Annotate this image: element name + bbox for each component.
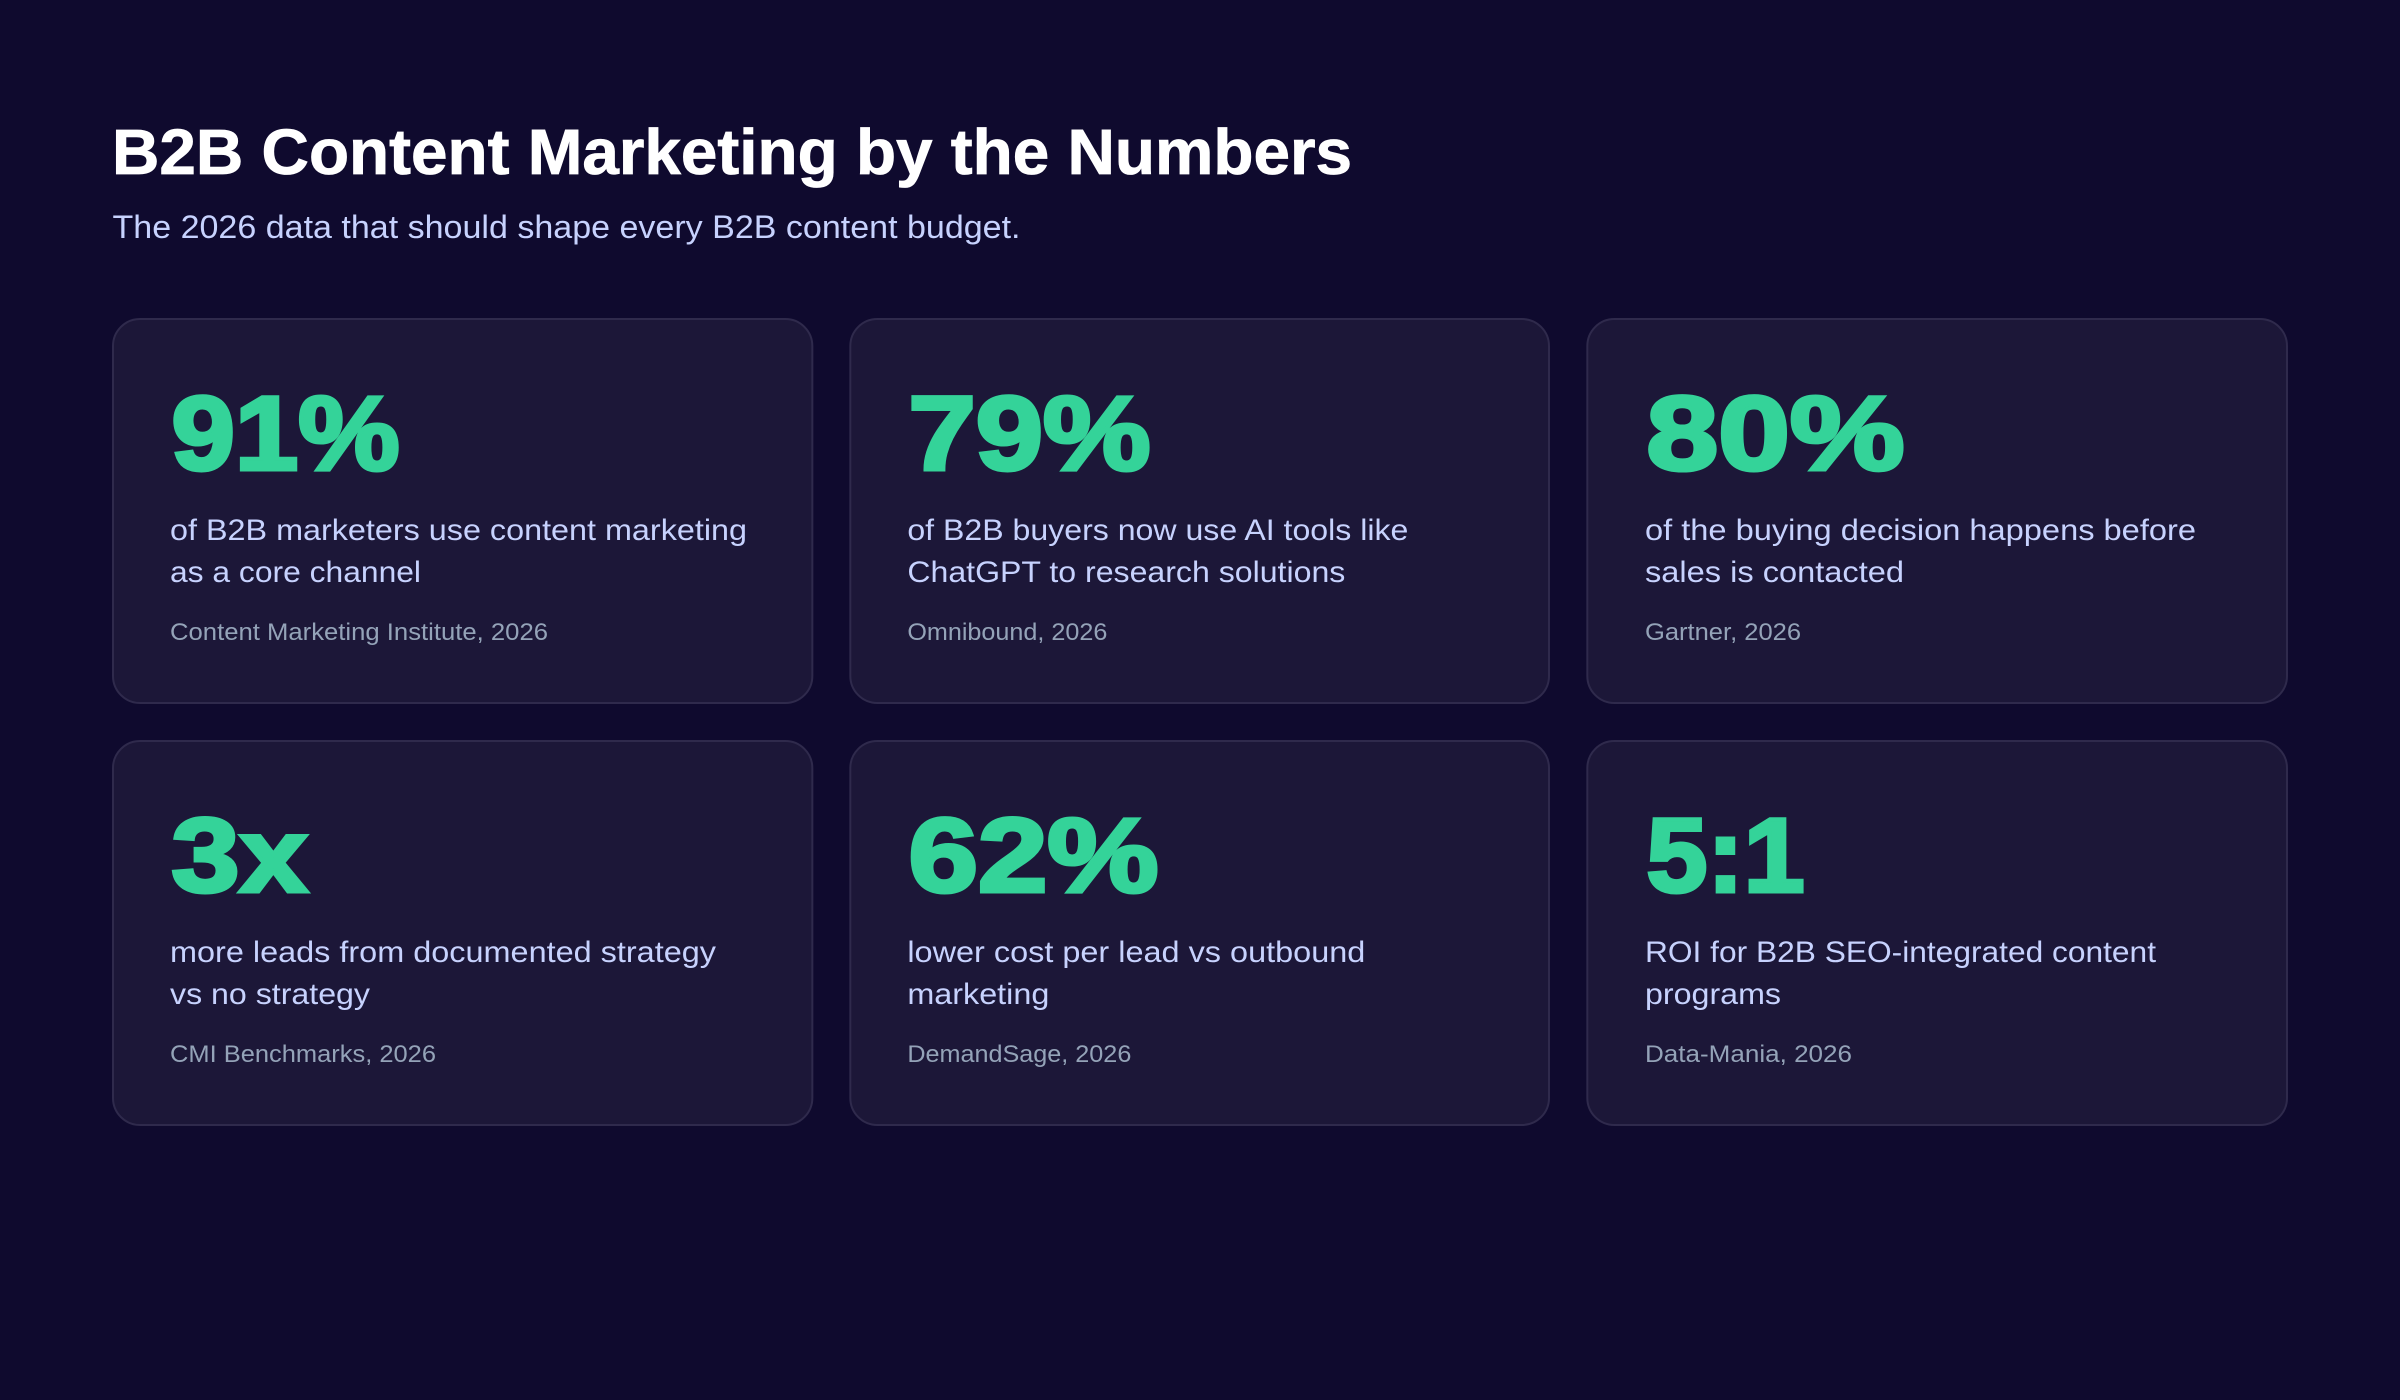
description: 62%: marketing bbox=[907, 978, 1049, 1011]
description: 3x: vs no strategy bbox=[170, 978, 370, 1011]
description: 5:1: ROI for B2B SEO-integrated content bbox=[1645, 936, 2157, 969]
description: 3x bbox=[170, 936, 716, 1011]
stat: 5:1: 5:1 bbox=[1646, 798, 1804, 914]
description: 79% bbox=[907, 514, 1408, 589]
stat: 80%: 80% bbox=[1646, 376, 1904, 492]
description: 80%: of the buying decision happens before bbox=[1645, 514, 2196, 547]
stat: 91%: 91% bbox=[172, 376, 400, 492]
source: CMI Benchmarks: CMI Benchmarks, 2026 bbox=[170, 1041, 436, 1068]
panel: 5:1 stat card bbox=[1587, 741, 2287, 1125]
panel: 80% stat card bbox=[1587, 319, 2287, 703]
source: Omnibound: Omnibound, 2026 bbox=[907, 619, 1107, 646]
stat: 3x: 3x bbox=[172, 798, 308, 914]
description: 80%: sales is contacted bbox=[1645, 556, 1904, 589]
panel: 62% stat card bbox=[850, 741, 1549, 1125]
title: B2B Content Marketing by the Numbers bbox=[112, 116, 1352, 188]
source: Data-Mania: Data-Mania, 2026 bbox=[1645, 1041, 1852, 1068]
description: 91%: as a core channel bbox=[170, 556, 421, 589]
description: 91% bbox=[170, 514, 747, 589]
description: 62% bbox=[907, 936, 1365, 1011]
description: 79%: of B2B buyers now use AI tools like bbox=[907, 514, 1408, 547]
source: DemandSage: DemandSage, 2026 bbox=[907, 1041, 1131, 1068]
source: Gartner: Gartner, 2026 bbox=[1645, 619, 1801, 646]
description: 79%: ChatGPT to research solutions bbox=[907, 556, 1345, 589]
stat: 62%: 62% bbox=[908, 798, 1158, 914]
stat: 79%: 79% bbox=[908, 376, 1150, 492]
panel: 79% stat card bbox=[850, 319, 1549, 703]
description: 80% bbox=[1645, 514, 2196, 589]
panel: 3x stat card bbox=[113, 741, 812, 1125]
description: 91%: of B2B marketers use content marketing bbox=[170, 514, 747, 547]
source: Content Marketing Institute: Content Marketing Institute, 2026 bbox=[170, 619, 548, 646]
description: 5:1 bbox=[1645, 936, 2157, 1011]
subtitle: The 2026 data that should shape every B2B content budget. bbox=[112, 209, 1020, 245]
description: 3x: more leads from documented strategy bbox=[170, 936, 716, 969]
panel: 91% stat card bbox=[113, 319, 812, 703]
description: 62%: lower cost per lead vs outbound bbox=[907, 936, 1365, 969]
description: 5:1: programs bbox=[1645, 978, 1781, 1011]
